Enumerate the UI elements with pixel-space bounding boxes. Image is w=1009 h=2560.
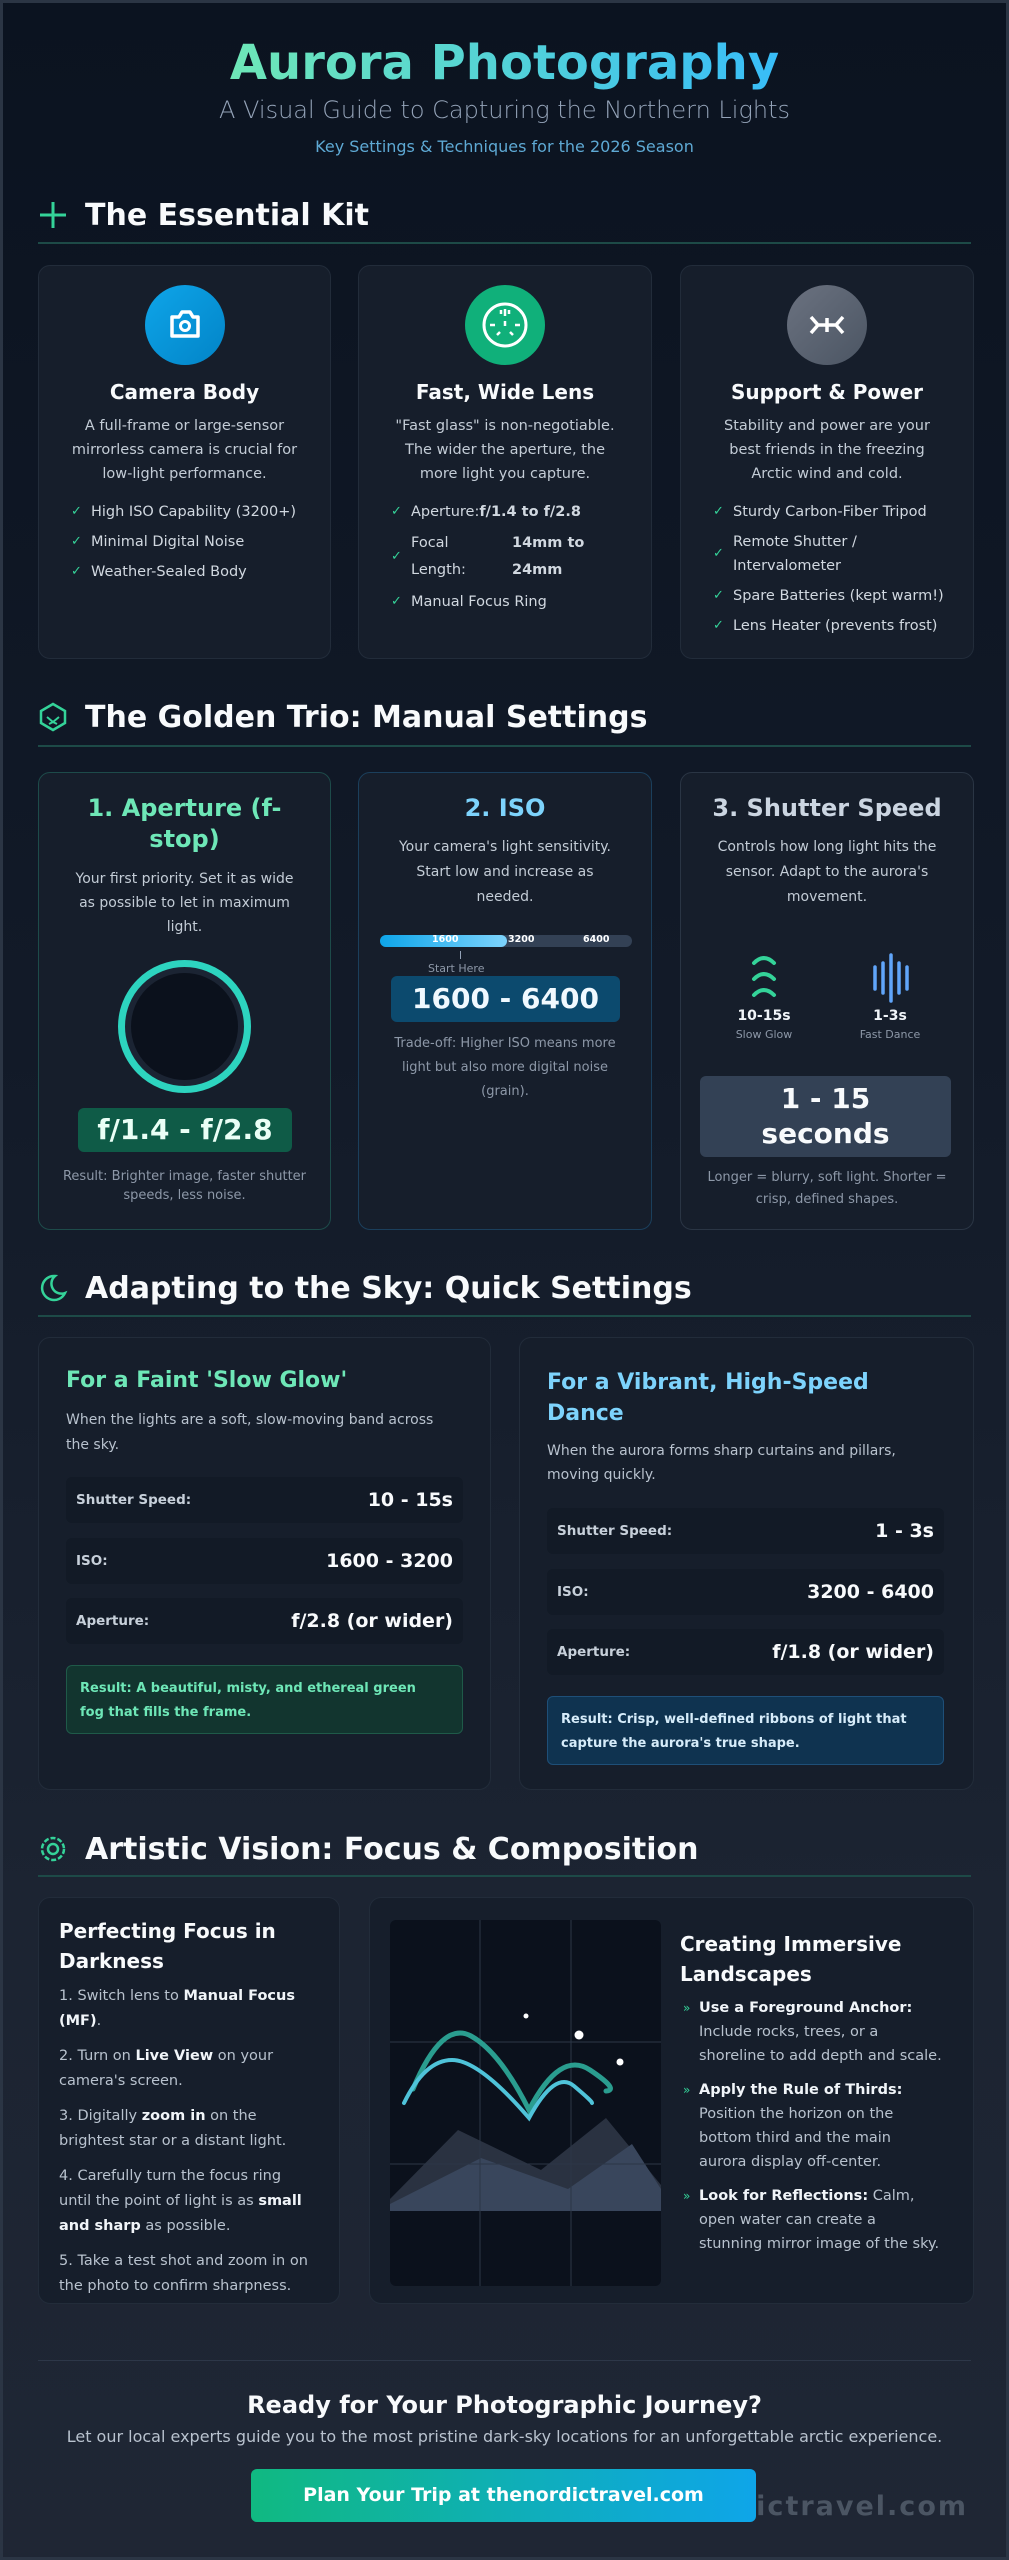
panel: iso: Trade-off: Higher ISO means more light but also more digital noise (grain).	[394, 1036, 616, 1099]
icon: lens	[465, 285, 545, 365]
chart: iso scale	[380, 935, 632, 947]
icon: slow glow	[752, 956, 776, 998]
panel: camera body: ✓	[71, 564, 82, 579]
panel: camera body: High ISO Capability (3200+)	[91, 504, 296, 520]
panel: composition: »	[683, 2001, 690, 2015]
panel: focus: 5. Take a test shot and zoom in on the photo to confirm sharpness.	[59, 2253, 308, 2294]
panel: lens: 14mm to 24mm	[512, 535, 584, 578]
panel: camera body: ✓	[71, 534, 82, 549]
heading: golden trio: The Golden Trio: Manual Settings	[85, 700, 647, 734]
panel: shutter: Slow Glow	[736, 1028, 792, 1041]
panel: slow glow: Aperture:	[76, 1613, 149, 1629]
value: shutter: seconds	[761, 1117, 890, 1150]
panel: lens: Focal Length:	[411, 535, 466, 578]
panel: composition: Creating Immersive Landscapes	[680, 1932, 901, 1986]
panel: lens: ✓	[391, 594, 402, 609]
value: aperture	[78, 1108, 292, 1152]
panel: slow glow: f/2.8 (or wider)	[291, 1610, 453, 1632]
footer text: Let our local experts guide you to the most pristine dark-sky locations for an unforgettable arctic experience.	[67, 2427, 942, 2446]
panel: iso: 2. ISO	[465, 794, 545, 822]
panel: aperture: 1. Aperture (f-stop)	[87, 794, 282, 853]
panel: lens: "Fast glass" is non-negotiable. The wider the aperture, the more light you capture.	[395, 418, 615, 482]
panel: fast dance: f/1.8 (or wider)	[772, 1641, 934, 1663]
panel: lens: ✓	[391, 504, 402, 519]
chart: iso scale: 3200	[508, 934, 534, 945]
panel: support: Intervalometer	[733, 558, 841, 574]
panel: fast dance: 3200 - 6400	[807, 1581, 934, 1603]
panel: slow glow: Shutter Speed:	[76, 1492, 191, 1508]
value: shutter	[700, 1076, 951, 1157]
panel: focus: Perfecting Focus in Darkness	[59, 1919, 276, 1973]
panel: iso: Start Here	[428, 962, 484, 975]
panel: fast dance: Shutter Speed:	[557, 1523, 672, 1539]
panel: shutter: Controls how long light hits the sensor. Adapt to the aurora's movement.	[718, 839, 936, 905]
panel: lens: f/1.4 to f/2.8	[479, 504, 581, 520]
panel: camera body: Camera Body	[110, 380, 259, 404]
panel: composition: Look for Reflections: Calm, open water can create a stunning mirror image of the sky.	[699, 2188, 939, 2252]
panel: shutter: 3. Shutter Speed	[712, 794, 942, 822]
callout: result green	[66, 1665, 463, 1734]
panel: camera body	[38, 265, 331, 659]
panel: aperture	[38, 772, 331, 1230]
icon: aperture ring	[118, 960, 251, 1093]
chart: iso scale: 1600	[432, 934, 458, 945]
panel: iso	[358, 772, 652, 1230]
panel: camera body: ✓	[71, 504, 82, 519]
panel: support: Support & Power	[731, 380, 923, 404]
panel: support: Stability and power are your best friends in the freezing Arctic wind and cold.	[724, 418, 930, 482]
panel: fast dance: For a Vibrant, High-Speed Dance	[547, 1370, 869, 1426]
panel: focus: 2. Turn on Live View on your camera's screen.	[59, 2048, 273, 2089]
panel: slow glow: ISO:	[76, 1553, 108, 1569]
panel: support: ✓	[713, 588, 724, 603]
value: aperture: f/1.4 - f/2.8	[97, 1113, 273, 1146]
panel: aperture: Your first priority. Set it as wide as possible to let in maximum light.	[76, 871, 294, 935]
icon: camera	[145, 285, 225, 365]
panel: shutter: Longer = blurry, soft light. Shorter = crisp, defined shapes.	[707, 1170, 947, 1207]
panel: slow glow: When the lights are a soft, slow-moving band across the sky.	[66, 1412, 433, 1453]
panel: camera body: Minimal Digital Noise	[91, 534, 244, 550]
panel: support: ✓	[713, 618, 724, 633]
heading: essential kit: The Essential Kit	[85, 198, 369, 232]
panel: focus: 1. Switch lens to Manual Focus (MF).	[59, 1988, 295, 2029]
panel: iso: Your camera's light sensitivity. Start low and increase as needed.	[399, 839, 611, 905]
chart: composition illustration	[390, 1920, 661, 2286]
panel: shutter	[680, 772, 974, 1230]
panel: camera body: Weather-Sealed Body	[91, 564, 247, 580]
watermark: thenordictravel.com	[621, 2491, 968, 2522]
panel: fast dance: Aperture:	[557, 1644, 630, 1660]
panel: support: Spare Batteries (kept warm!)	[733, 588, 944, 604]
heading: artistic: Artistic Vision: Focus & Composition	[85, 1832, 699, 1866]
panel: focus: 4. Carefully turn the focus ring until the point of light is as small and sharp as possible.	[59, 2168, 302, 2234]
panel: camera body: A full-frame or large-sensor mirrorless camera is crucial for low-light performance.	[72, 418, 297, 482]
value: iso	[391, 976, 620, 1022]
tagline: Key Settings & Techniques for the 2026 Season	[315, 137, 694, 156]
panel: fast dance: ISO:	[557, 1584, 589, 1600]
panel: lens: Manual Focus Ring	[411, 594, 547, 610]
panel: support: ✓	[713, 504, 724, 519]
panel: composition: Apply the Rule of Thirds: Position the horizon on the bottom third and the main aurora display off-center.	[699, 2082, 902, 2170]
panel: support: Remote Shutter /	[733, 534, 857, 550]
panel: fast dance: When the aurora forms sharp curtains and pillars, moving quickly.	[547, 1443, 896, 1483]
panel: fast dance: 1 - 3s	[875, 1520, 934, 1542]
icon: tripod	[787, 285, 867, 365]
callout: result blue: Result: Crisp, well-defined ribbons of light that capture the aurora's true shape.	[561, 1712, 907, 1751]
panel: composition: »	[683, 2083, 690, 2097]
subtitle: A Visual Guide to Capturing the Northern Lights	[219, 96, 790, 124]
panel: shutter: Fast Dance	[860, 1028, 920, 1041]
panel: slow glow: 10 - 15s	[368, 1489, 453, 1511]
panel: support: Lens Heater (prevents frost)	[733, 618, 937, 634]
panel: composition: Use a Foreground Anchor: Include rocks, trees, or a shoreline to add depth and scale.	[699, 2000, 942, 2064]
panel: lens: Fast, Wide Lens	[416, 380, 594, 404]
button: cta: Plan Your Trip at thenordictravel.com	[303, 2484, 704, 2506]
callout: result green: Result: A beautiful, misty, and ethereal green fog that fills the frame.	[80, 1681, 416, 1720]
panel: lens: Aperture:	[411, 504, 479, 520]
value: iso: 1600 - 6400	[412, 982, 599, 1015]
icon: fast dance	[873, 953, 909, 1003]
panel: fast dance	[519, 1337, 974, 1790]
panel: support: Sturdy Carbon-Fiber Tripod	[733, 504, 927, 520]
panel: composition	[369, 1897, 974, 2304]
panel: support	[680, 265, 974, 659]
panel: shutter: 10-15s	[737, 1008, 791, 1024]
chart: iso scale: 6400	[583, 934, 609, 945]
footer heading: Ready for Your Photographic Journey?	[247, 2391, 762, 2419]
panel: focus	[38, 1897, 340, 2304]
panel: shutter: 1-3s	[873, 1008, 907, 1024]
panel: focus: 3. Digitally zoom in on the brightest star or a distant light.	[59, 2108, 286, 2149]
callout: result blue	[547, 1696, 944, 1765]
panel: lens: ✓	[391, 549, 402, 564]
panel: slow glow: 1600 - 3200	[326, 1550, 453, 1572]
panel: lens	[358, 265, 652, 659]
panel: composition: »	[683, 2189, 690, 2203]
panel: aperture: Result: Brighter image, faster shutter speeds, less noise.	[63, 1169, 306, 1203]
button: cta	[251, 2469, 756, 2522]
panel: slow glow	[38, 1337, 491, 1790]
heading: adapting: Adapting to the Sky: Quick Settings	[85, 1270, 692, 1306]
value: shutter: 1 - 15	[781, 1082, 870, 1115]
panel: support: ✓	[713, 546, 724, 561]
title: Aurora Photography	[230, 35, 779, 91]
panel: slow glow: For a Faint 'Slow Glow'	[66, 1368, 347, 1393]
